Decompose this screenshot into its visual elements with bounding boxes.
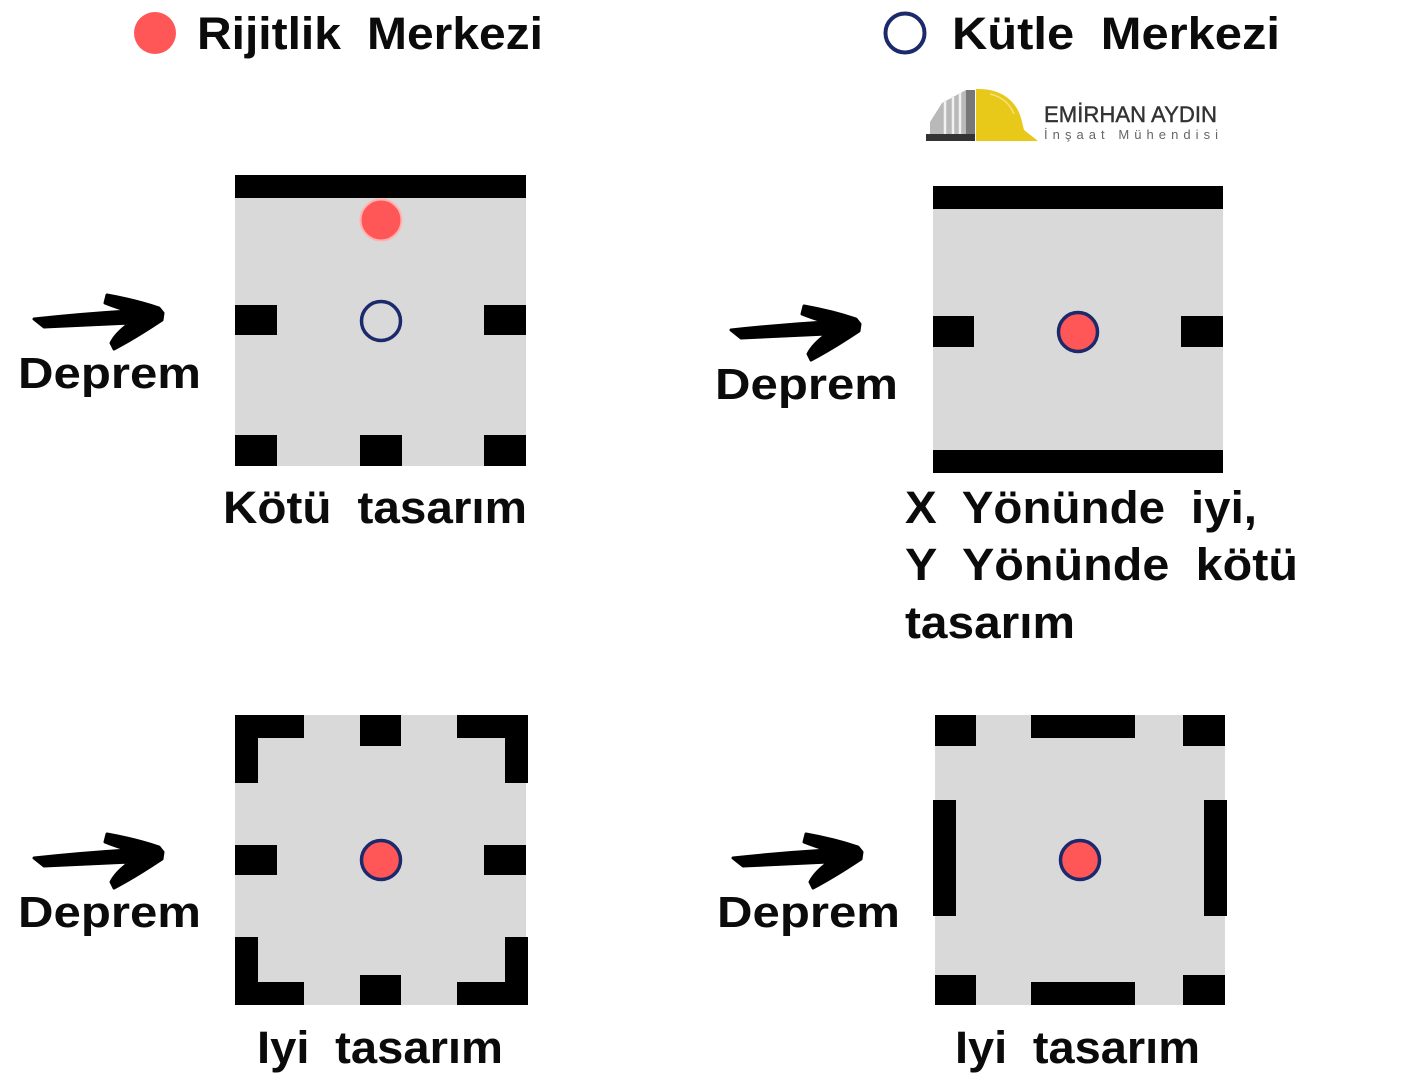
panel: X good Y bad design [933, 186, 1223, 473]
legend: mass center: Kütle Merkezi [952, 8, 1280, 59]
caption: bad design: Kötü tasarım [223, 482, 527, 533]
legend: rigidity center: Rijitlik Merkezi [197, 8, 543, 59]
coincident centers marker [1058, 312, 1098, 352]
logo: Emirhan Aydın [926, 89, 1218, 142]
panel: good design with edge walls [933, 715, 1227, 1005]
panel: bad design [235, 175, 526, 466]
arrow: earthquake 3 [18, 834, 201, 937]
coincident centers marker [362, 840, 400, 880]
arrow: earthquake 3: Deprem [18, 888, 201, 937]
arrow: earthquake 4: Deprem [717, 888, 900, 937]
panel: good design with corner walls [235, 715, 528, 1005]
caption: X good Y bad design [905, 482, 1298, 648]
rigidity center marker [360, 200, 402, 240]
caption: good design 1: Iyi tasarım [257, 1022, 503, 1073]
arrow: earthquake 1: Deprem [18, 349, 201, 398]
caption: X good Y bad design: X Yönünde iyi, [905, 482, 1257, 533]
arrow: earthquake 4 [717, 834, 900, 937]
arrow: earthquake 2 [715, 306, 898, 409]
logo: Emirhan Aydın: İnşaat Mühendisi [1044, 127, 1218, 142]
caption: X good Y bad design: tasarım [905, 597, 1075, 648]
coincident centers marker [1060, 840, 1100, 880]
arrow: earthquake 2: Deprem [715, 360, 898, 409]
caption: X good Y bad design: Y Yönünde kötü [905, 539, 1298, 590]
arrow: earthquake 1 [18, 295, 201, 398]
caption: good design 2: Iyi tasarım [955, 1022, 1200, 1073]
mass center marker [362, 302, 400, 340]
logo: Emirhan Aydın: EMİRHAN AYDIN [1044, 102, 1217, 127]
